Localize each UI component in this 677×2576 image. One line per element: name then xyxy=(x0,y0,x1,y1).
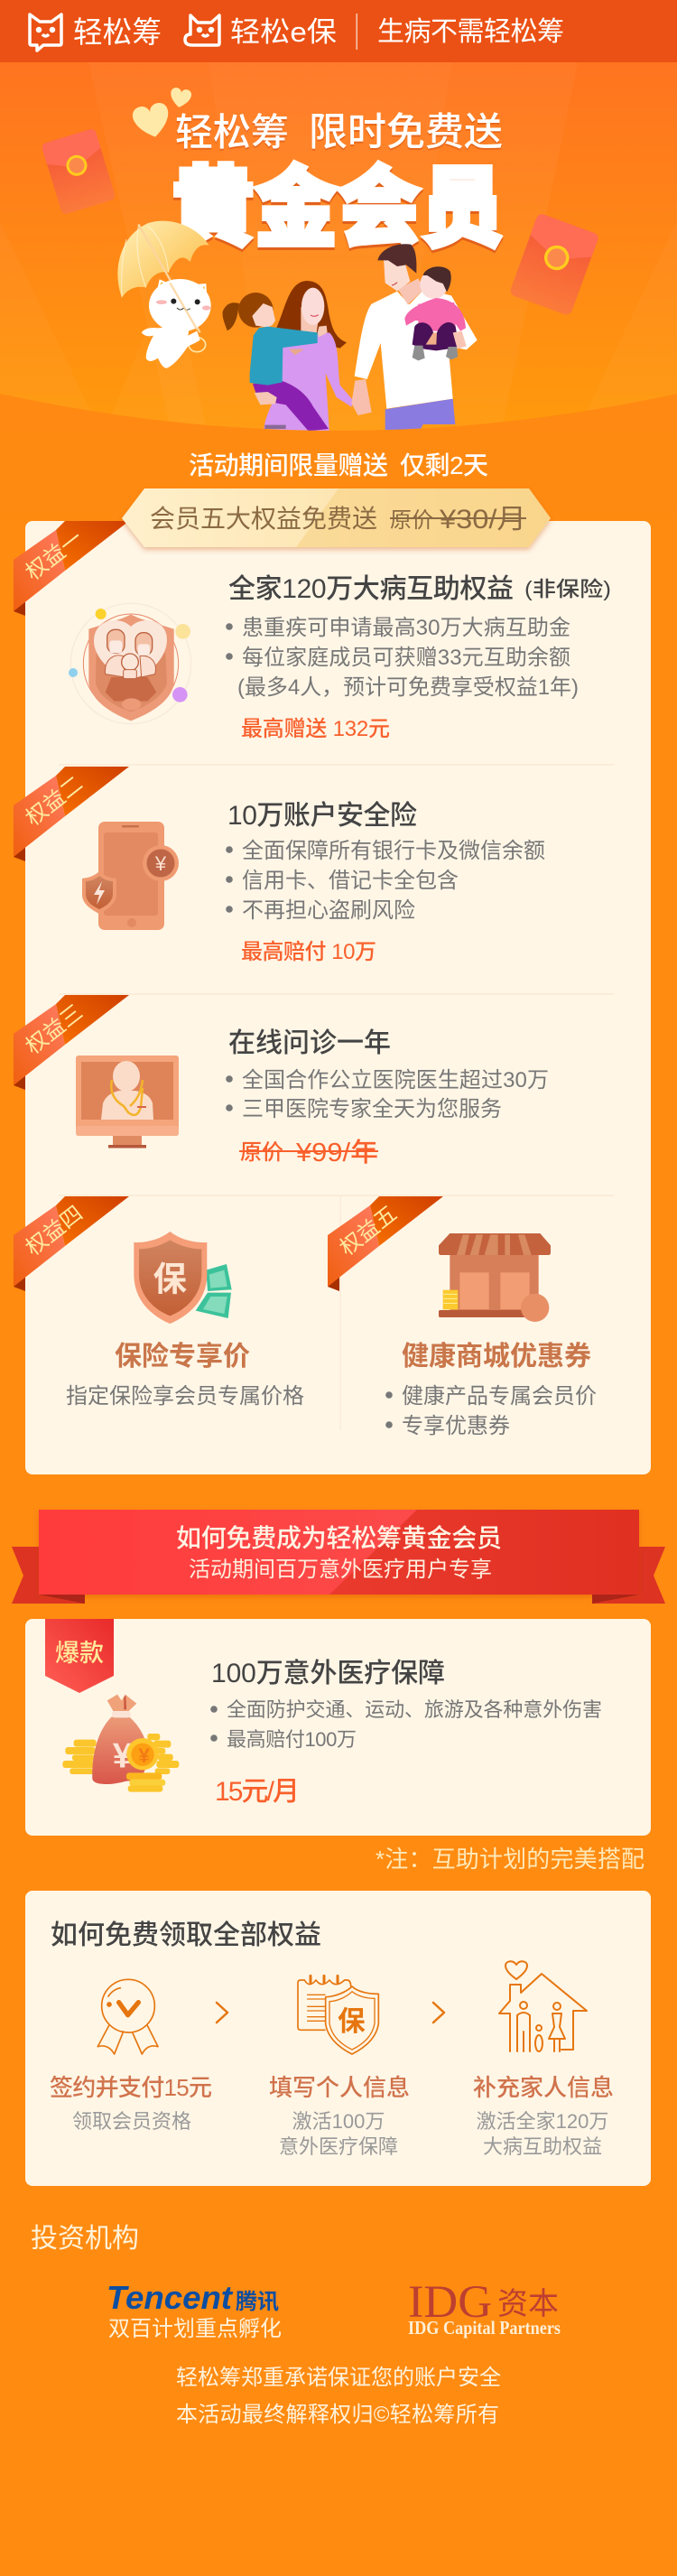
heading: how to claim all benefits: 如何免费领取全部权益 xyxy=(51,1920,321,1950)
icon: store xyxy=(439,1233,551,1322)
hero title line: 限时免费送 xyxy=(309,111,503,154)
bullets and price: 全面防护交通、运动、旅游及各种意外伤害 xyxy=(227,1698,602,1721)
benefit 1 text: (最多4人，预计可免费享受权益1年) xyxy=(237,675,579,700)
icon: doctor on monitor xyxy=(76,1056,179,1149)
benefit 1 text: (非保险) xyxy=(524,577,611,600)
subheading: limited offer xyxy=(189,451,488,479)
icon: red envelope left xyxy=(41,128,116,215)
panel: five benefits card xyxy=(25,521,651,1474)
step 1 text xyxy=(50,2074,212,2133)
bullets and price xyxy=(210,1698,602,1807)
banner: five benefits free xyxy=(122,488,551,547)
heading: investors: 投资机构 xyxy=(31,2224,139,2254)
slogan: 生病不需轻松筹 xyxy=(377,17,564,47)
icon: money bag and coins: ¥ xyxy=(113,1735,133,1775)
step 3 text: 激活全家120万 xyxy=(477,2110,608,2133)
benefit 3 text xyxy=(226,1028,549,1167)
footer notes: 本活动最终解释权归©轻松筹所有 xyxy=(176,2403,499,2427)
benefit 1 text: 患重疾可申请最高30万大病互助金 xyxy=(242,616,570,640)
bullets and price: 15元/月 xyxy=(215,1777,300,1807)
hero background with rays xyxy=(0,62,677,431)
banner: five benefits free: 原价 xyxy=(390,508,433,533)
header bar with logos xyxy=(0,0,677,62)
step 2 text: 意外医疗保障 xyxy=(279,2135,398,2158)
benefit 2 text: 信用卡、借记卡全包含 xyxy=(242,869,459,893)
benefit 1 text: 最高赠送 132元 xyxy=(241,717,390,741)
logo text: e-bao: 轻松e保 xyxy=(230,16,337,48)
benefit 4 text: 指定保险享会员专属价格 xyxy=(66,1384,304,1409)
subheading: limited offer: 活动期间限量赠送 xyxy=(189,451,388,479)
benefit 2 text: 不再担心盗刷风险 xyxy=(242,898,415,923)
benefit 2 text: 全面保障所有银行卡及微信余额 xyxy=(242,839,545,863)
panel: accident insurance card xyxy=(25,1619,651,1836)
icon: medal xyxy=(97,1979,158,2054)
icon: red envelope right xyxy=(509,213,599,316)
benefit 4 text xyxy=(66,1342,304,1409)
ribbon: benefit 2: 权益二 xyxy=(22,772,88,831)
step 3 text: 补充家人信息 xyxy=(473,2074,614,2101)
step 3 text: 大病互助权益 xyxy=(483,2135,602,2158)
benefit 5 text: 专享优惠券 xyxy=(402,1414,510,1438)
step 1 text: 领取会员资格 xyxy=(72,2110,191,2133)
icon: cat logo xyxy=(30,14,61,51)
icon: hearts xyxy=(131,87,192,141)
daughter xyxy=(223,293,329,431)
mother xyxy=(264,281,354,433)
benefit 2 text xyxy=(226,801,545,964)
step 1 text: 签约并支付15元 xyxy=(50,2074,212,2101)
benefit 5 text: 健康商城优惠券 xyxy=(402,1342,591,1372)
icon: policy document with shield xyxy=(298,1976,378,2054)
note: perfect match: *注：互助计划的完美搭配 xyxy=(376,1846,645,1873)
icon: arrow 2 xyxy=(433,2003,444,2023)
baby xyxy=(404,266,467,360)
benefit 5 text: 健康产品专属会员价 xyxy=(402,1384,597,1409)
red ribbon banner: how to become member xyxy=(12,1510,665,1604)
benefit 3 text: 在线问诊一年 xyxy=(228,1028,391,1058)
icon: family shield xyxy=(69,603,191,724)
hero headline: gold member: 黄金会员 xyxy=(172,159,504,257)
step 2 text: 激活100万 xyxy=(292,2110,385,2133)
icon: phone with shield and coin: ¥ xyxy=(154,852,167,875)
icon: insurance shield with money xyxy=(134,1232,232,1324)
ribbon: benefit 1 xyxy=(14,521,129,616)
ribbon: benefit 5 xyxy=(328,1196,443,1291)
logo: Tencent xyxy=(107,2279,282,2341)
logo text: qingsongchou: 轻松筹 xyxy=(73,15,162,49)
panel: how to claim xyxy=(25,1891,651,2186)
tag: hot item xyxy=(45,1619,114,1693)
ribbon: benefit 2 xyxy=(14,767,129,861)
illustration: family xyxy=(223,244,478,433)
ribbon: benefit 1: 权益一 xyxy=(22,526,88,585)
benefit 1 text: 每位家庭成员可获赠33元互助余额 xyxy=(242,646,570,670)
logo: IDG Capital: IDG xyxy=(408,2277,492,2328)
banner: five benefits free: ¥30/月 xyxy=(439,505,526,535)
hero title line: 轻松筹 xyxy=(175,111,289,153)
tag: hot item: 爆款 xyxy=(55,1640,104,1667)
subheading: limited offer: 仅剩2天 xyxy=(400,451,488,479)
benefit 1 text xyxy=(226,574,611,741)
icon: arrow 1 xyxy=(217,2003,227,2023)
step 2 text: 填写个人信息 xyxy=(269,2074,410,2101)
ribbon: benefit 3: 权益三 xyxy=(22,1000,88,1059)
logo: IDG Capital: 资本 xyxy=(497,2287,559,2321)
banner: five benefits free: 会员五大权益免费送 xyxy=(150,505,377,533)
ribbon: benefit 4: 权益四 xyxy=(22,1202,88,1260)
bullets and price: 最高赔付100万 xyxy=(227,1728,357,1751)
hero title line xyxy=(175,111,503,154)
ribbon: benefit 4 xyxy=(14,1196,129,1291)
icon: money bag and coins xyxy=(62,1695,179,1792)
icon: phone with shield and coin xyxy=(82,822,179,930)
logo: Tencent: 腾讯 xyxy=(236,2290,279,2314)
ribbon: benefit 5: 权益五 xyxy=(336,1202,402,1260)
step 3 text xyxy=(473,2074,614,2158)
icon: money bag and coins: ¥ xyxy=(139,1744,151,1767)
red ribbon banner: how to become member: 如何免费成为轻松筹黄金会员 xyxy=(176,1524,502,1552)
icon: family house xyxy=(499,1961,587,2051)
icon: policy document with shield: 保 xyxy=(338,2006,366,2037)
footer notes xyxy=(176,2366,501,2427)
icon: cat logo e-bao xyxy=(185,15,219,45)
benefit 2 text: 最高赔付 10万 xyxy=(241,940,376,964)
benefit 3 text: 全国合作公立医院医生超过30万 xyxy=(242,1068,549,1093)
logo: Tencent: Tencent xyxy=(107,2279,234,2316)
logo: Tencent: 双百计划重点孵化 xyxy=(108,2317,282,2341)
benefit 3 text: 原价 xyxy=(240,1140,283,1165)
logo: IDG Capital xyxy=(408,2277,561,2339)
icon: insurance shield with money: 保 xyxy=(153,1260,188,1297)
benefit 3 text: 三甲医院专家全天为您服务 xyxy=(242,1097,502,1121)
red ribbon banner: how to become member: 活动期间百万意外医疗用户专享 xyxy=(189,1558,492,1582)
benefit 2 text: 10万账户安全险 xyxy=(227,801,417,831)
heading: accident medical cover: 100万意外医疗保障 xyxy=(211,1659,445,1688)
illustration: umbrella and cat mascot xyxy=(117,221,211,368)
benefit 4 text: 保险专享价 xyxy=(115,1342,250,1372)
footer notes: 轻松筹郑重承诺保证您的账户安全 xyxy=(176,2366,501,2390)
benefit 5 text xyxy=(385,1342,597,1438)
ribbon: benefit 3 xyxy=(14,995,129,1090)
logo: IDG Capital: IDG Capital Partners xyxy=(408,2317,561,2339)
benefit 3 text: ¥99/年 xyxy=(295,1138,378,1167)
step 2 text xyxy=(269,2074,410,2158)
father xyxy=(351,244,478,431)
benefit 1 text: 全家120万大病互助权益 xyxy=(228,574,514,604)
